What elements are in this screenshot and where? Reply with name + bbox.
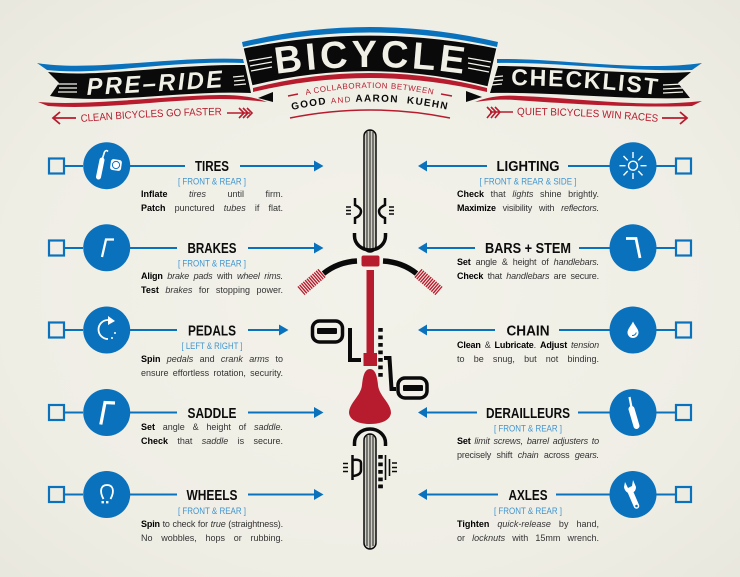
handlebars — [301, 261, 439, 291]
rear tire — [364, 434, 376, 549]
icon: wrench — [624, 480, 638, 507]
title: AXLES — [508, 488, 548, 504]
title: SADDLE — [188, 406, 237, 422]
body text: Align brake pads with wheel rims. — [141, 271, 283, 281]
body text: No wobbles, hops or rubbing. — [141, 533, 283, 543]
body text — [457, 339, 599, 367]
icon: screwdriver — [630, 397, 636, 426]
sublabel: [ FRONT & REAR ] — [178, 258, 246, 270]
title: BARS + STEM — [485, 241, 571, 257]
icon: handlebar stem — [626, 238, 640, 258]
title: LIGHTING — [496, 159, 560, 175]
body text — [141, 518, 283, 546]
body text: Spin to check for true (straightness). — [141, 519, 283, 529]
icon: rotation arrow — [99, 316, 116, 339]
credit: collaboration: A COLLABORATION BETWEEN — [306, 82, 434, 95]
right pedal and crank — [384, 358, 427, 398]
front tire — [364, 130, 376, 252]
front brakes — [346, 198, 394, 224]
tagline: clean bicycles go faster: CLEAN BICYCLES GO FASTER — [81, 108, 222, 122]
panel: derailleurs — [418, 389, 691, 463]
body text: Inflate tires until firm. — [141, 189, 283, 199]
body text — [457, 435, 599, 463]
stem — [361, 255, 380, 267]
body text: to be snug, but not binding. — [457, 354, 599, 364]
body text: Set angle & height of saddle. — [141, 422, 283, 432]
rear fender — [354, 429, 386, 446]
body text: Set limit screws, barrel adjusters to — [457, 436, 599, 446]
left pedal and crank — [312, 321, 361, 360]
panel: tires — [49, 142, 324, 216]
heading: checklist: CHECKLIST — [512, 69, 658, 94]
title: PEDALS — [188, 324, 236, 340]
panel: pedals — [49, 306, 288, 381]
panel: lighting — [418, 142, 691, 216]
panel: wheels — [49, 471, 324, 546]
body text: Check that handlebars are secure. — [457, 271, 599, 281]
credit: collaboration — [288, 82, 452, 119]
body text — [141, 270, 283, 298]
banner: checklist ribbon — [466, 59, 702, 106]
frame — [364, 270, 377, 366]
title: WHEELS — [186, 488, 238, 504]
banner: bicycle centre ribbon — [242, 27, 498, 92]
body text — [141, 188, 283, 216]
sublabel: [ LEFT & RIGHT ] — [182, 341, 242, 352]
body text: ensure effortless rotation, security. — [141, 368, 283, 378]
panel: axles — [418, 471, 691, 546]
body text: Clean & Lubricate. Adjust tension — [457, 340, 599, 350]
body text: Maximize visibility with reflectors. — [457, 203, 599, 213]
body text: or locknuts with 15mm wrench. — [457, 533, 599, 543]
body text: precisely shift chain across gears. — [457, 450, 599, 460]
icon: tyre lever omega — [101, 485, 113, 503]
title: BRAKES — [188, 241, 237, 257]
panel: chain — [418, 306, 691, 367]
icon: seat post — [101, 402, 115, 424]
body text: Set angle & height of handlebars. — [457, 257, 599, 267]
icon: pump and patch — [98, 151, 122, 177]
panel: saddle — [49, 389, 324, 449]
sublabel: [ FRONT & REAR & SIDE ] — [480, 176, 576, 188]
credit: collaboration: GOOD AND AARON KUEHN — [292, 94, 448, 110]
rear brake — [343, 455, 361, 480]
chain — [378, 328, 383, 378]
title: DERAILLEURS — [486, 406, 570, 422]
title: CHAIN — [506, 324, 550, 340]
heading: pre-ride: PRE–RIDE — [87, 70, 222, 95]
body text: Test brakes for stopping power. — [141, 285, 283, 295]
body text — [457, 518, 599, 546]
icon: brake lever — [102, 240, 114, 257]
banner: pre-ride ribbon — [37, 58, 273, 107]
icon: oil drop — [628, 322, 638, 338]
body text — [141, 421, 283, 449]
sublabel: [ FRONT & REAR ] — [494, 424, 562, 434]
body text: Check that saddle is secure. — [141, 436, 283, 446]
title: TIRES — [195, 159, 229, 175]
tagline: quiet bicycles win races: QUIET BICYCLES WIN RACES — [518, 108, 658, 122]
tagline: clean bicycles go faster — [52, 107, 253, 125]
sublabel: [ FRONT & REAR ] — [178, 506, 246, 517]
heading: bicycle: BICYCLE — [275, 40, 464, 74]
front fender — [354, 233, 386, 250]
body text — [457, 188, 599, 216]
rear derailleur — [378, 455, 397, 488]
sublabel: [ FRONT & REAR ] — [178, 176, 246, 188]
body text — [457, 256, 599, 284]
sublabel: [ FRONT & REAR ] — [494, 506, 562, 517]
body text — [141, 353, 283, 381]
panel: bars + stem — [418, 224, 691, 284]
body text: Spin pedals and crank arms to — [141, 354, 283, 364]
icon: sun — [620, 152, 646, 179]
saddle — [349, 369, 391, 424]
body text: Tighten quick-release by hand, — [457, 519, 599, 529]
panel: brakes — [49, 224, 324, 298]
bicycle diagram — [301, 130, 439, 549]
body text: Patch punctured tubes if flat. — [141, 203, 283, 213]
body text: Check that lights shine brightly. — [457, 189, 599, 199]
